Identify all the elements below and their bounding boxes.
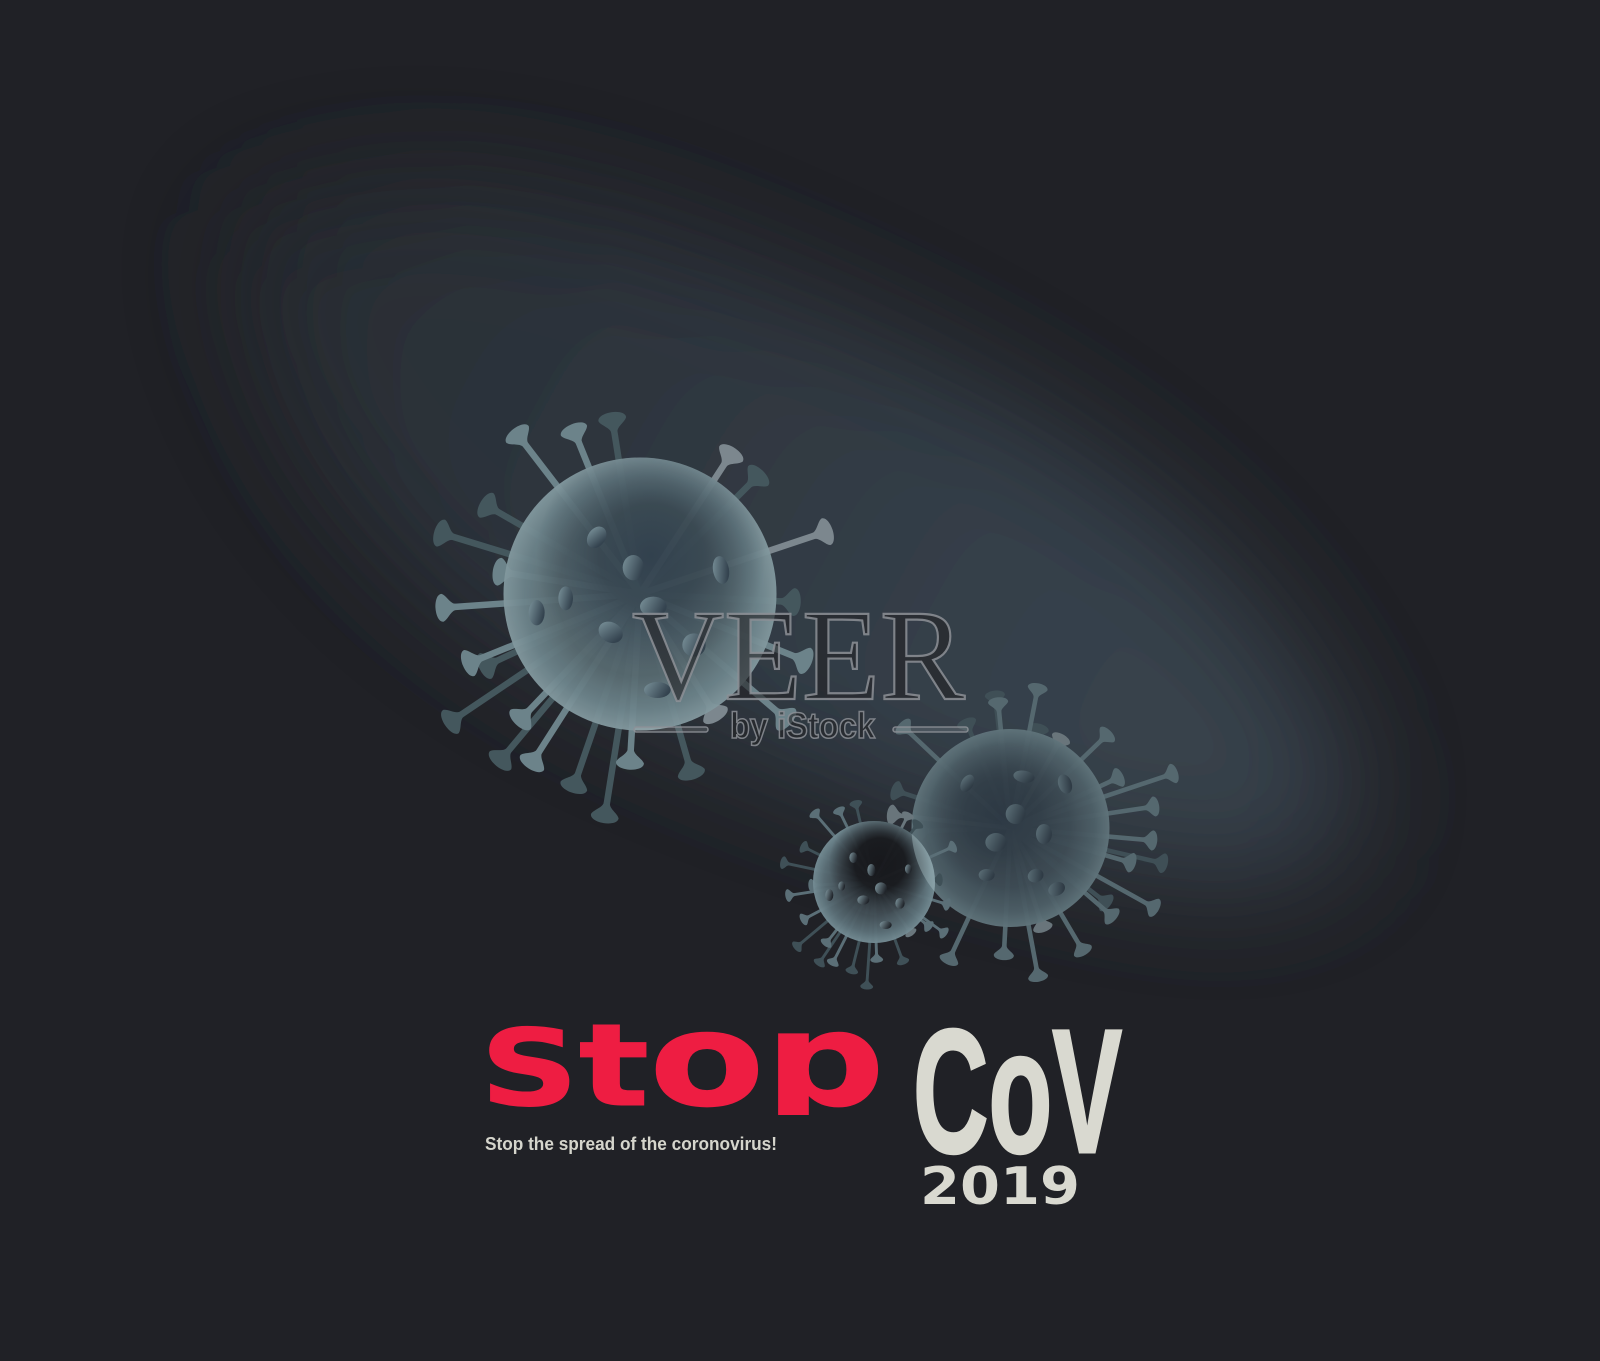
medium virus dimples [957, 769, 1075, 899]
small virus overlap highlight [912, 834, 935, 891]
medium virus sphere [912, 729, 1110, 927]
large virus sphere [504, 458, 776, 730]
watermark: right rule [893, 727, 968, 732]
watermark: by iStock: by iStock [730, 705, 876, 746]
watermark: VEER: VEER [632, 584, 965, 728]
virus: medium [886, 681, 1181, 984]
large virus dimples [529, 523, 731, 698]
watermark: left rule [634, 727, 708, 732]
virus: large [430, 410, 837, 825]
background glow band [230, 186, 1355, 882]
medium virus spikes [886, 681, 1181, 984]
title: 2019: 2019 [920, 1157, 1080, 1217]
subtitle: Stop the spread of the coronovirus! [485, 1134, 777, 1154]
watermark [632, 584, 968, 746]
large virus spikes [430, 410, 837, 825]
small virus sphere [813, 821, 935, 943]
title: CoV: CoV [913, 994, 1122, 1190]
small virus spikes [779, 799, 959, 990]
virus: small [780, 800, 957, 990]
title: Stop: Stop [480, 984, 885, 1136]
small virus dimples [825, 852, 912, 929]
